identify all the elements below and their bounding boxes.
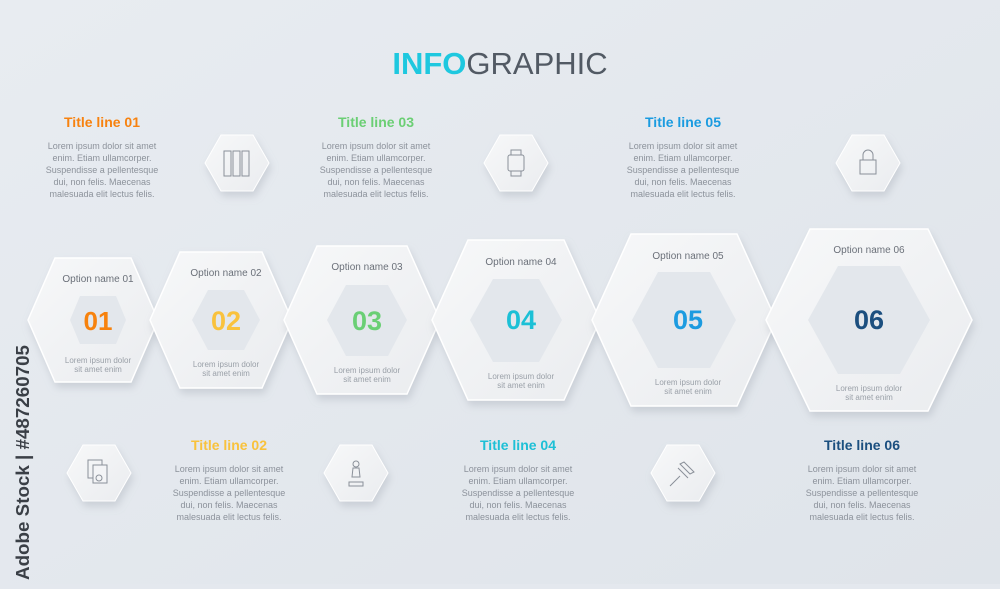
- hexagon 06: Option name 06: [833, 245, 905, 256]
- text block 05: Suspendisse a pellentesque: [627, 165, 739, 175]
- hexagon 01: sit amet enim: [74, 365, 122, 374]
- hexagon 05: 05: [673, 305, 703, 335]
- text block 02: dui, non felis. Maecenas: [180, 500, 278, 510]
- hexagon 05: Option name 05: [652, 251, 724, 262]
- text block 06: Suspendisse a pellentesque: [806, 488, 918, 498]
- hexagon 05: Lorem ipsum dolor: [655, 378, 721, 387]
- text block 04: [462, 437, 574, 522]
- text block 04: enim. Etiam ullamcorper.: [468, 476, 568, 486]
- text block 03: Lorem ipsum dolor sit amet: [322, 141, 431, 151]
- text block 06: Lorem ipsum dolor sit amet: [808, 464, 917, 474]
- text block 03: malesuada elit lectus felis.: [323, 189, 429, 199]
- title: INFOGRAPHIC: [392, 46, 608, 81]
- text block 05: dui, non felis. Maecenas: [634, 177, 732, 187]
- text block 02: malesuada elit lectus felis.: [176, 512, 282, 522]
- hexagon 01: 01: [84, 306, 112, 336]
- icon: documents: [67, 445, 131, 501]
- hexagon 06: [766, 229, 972, 411]
- text block 04: dui, non felis. Maecenas: [469, 500, 567, 510]
- text block 04: malesuada elit lectus felis.: [465, 512, 571, 522]
- hexagon 04: Option name 04: [485, 257, 557, 268]
- text block 03: dui, non felis. Maecenas: [327, 177, 425, 187]
- text block 06: enim. Etiam ullamcorper.: [812, 476, 912, 486]
- hexagon 04: sit amet enim: [497, 381, 545, 390]
- text block 06: [806, 437, 918, 522]
- text block 03: enim. Etiam ullamcorper.: [326, 153, 426, 163]
- text block 02: Suspendisse a pellentesque: [173, 488, 285, 498]
- text block 05: [627, 114, 739, 199]
- hexagon 02: Option name 02: [190, 268, 262, 279]
- hexagon 02: sit amet enim: [202, 369, 250, 378]
- icon: smartwatch: [484, 135, 548, 191]
- text block 05: Title line 05: [645, 114, 721, 130]
- text block 01: malesuada elit lectus felis.: [49, 189, 155, 199]
- text block 02: enim. Etiam ullamcorper.: [179, 476, 279, 486]
- hexagon 03: sit amet enim: [343, 375, 391, 384]
- text block 04: Suspendisse a pellentesque: [462, 488, 574, 498]
- text block 01: Lorem ipsum dolor sit amet: [48, 141, 157, 151]
- text block 02: Title line 02: [191, 437, 267, 453]
- text block 04: Title line 04: [480, 437, 556, 453]
- hexagon 06: sit amet enim: [845, 393, 893, 402]
- text block 03: [320, 114, 432, 199]
- hexagon 04: 04: [506, 305, 536, 335]
- hexagon 03: 03: [352, 306, 382, 336]
- text block 04: Lorem ipsum dolor sit amet: [464, 464, 573, 474]
- hexagon 02: [150, 252, 292, 388]
- text block 05: malesuada elit lectus felis.: [630, 189, 736, 199]
- hexagon 06: 06: [854, 305, 884, 335]
- text block 02: [173, 437, 285, 522]
- text block 06: dui, non felis. Maecenas: [813, 500, 911, 510]
- text block 01: dui, non felis. Maecenas: [53, 177, 151, 187]
- hexagon 02: Lorem ipsum dolor: [193, 360, 259, 369]
- icon: push pin: [651, 445, 715, 501]
- text block 03: Title line 03: [338, 114, 414, 130]
- text block 03: Suspendisse a pellentesque: [320, 165, 432, 175]
- hexagon 03: [284, 246, 440, 394]
- hexagon 01: [28, 258, 158, 382]
- hexagon 03: Option name 03: [331, 262, 403, 273]
- icon: chess pawn: [324, 445, 388, 501]
- hexagon 06: Lorem ipsum dolor: [836, 384, 902, 393]
- text block 01: enim. Etiam ullamcorper.: [52, 153, 152, 163]
- watermark id: Adobe Stock | #487260705: [13, 345, 33, 580]
- icon: binders: [205, 135, 269, 191]
- text block 02: Lorem ipsum dolor sit amet: [175, 464, 284, 474]
- hexagon 04: Lorem ipsum dolor: [488, 372, 554, 381]
- hexagon 05: [592, 234, 776, 406]
- text block 01: Suspendisse a pellentesque: [46, 165, 158, 175]
- icon: lock: [836, 135, 900, 191]
- hexagon 02: 02: [211, 306, 241, 336]
- hexagon 05: sit amet enim: [664, 387, 712, 396]
- text block 06: Title line 06: [824, 437, 900, 453]
- text block 05: enim. Etiam ullamcorper.: [633, 153, 733, 163]
- hexagon 01: Option name 01: [62, 274, 134, 285]
- text block 01: [46, 114, 158, 199]
- hexagon 01: Lorem ipsum dolor: [65, 356, 131, 365]
- hexagon 04: [432, 240, 600, 400]
- text block 06: malesuada elit lectus felis.: [809, 512, 915, 522]
- text block 05: Lorem ipsum dolor sit amet: [629, 141, 738, 151]
- hexagon 03: Lorem ipsum dolor: [334, 366, 400, 375]
- text block 01: Title line 01: [64, 114, 140, 130]
